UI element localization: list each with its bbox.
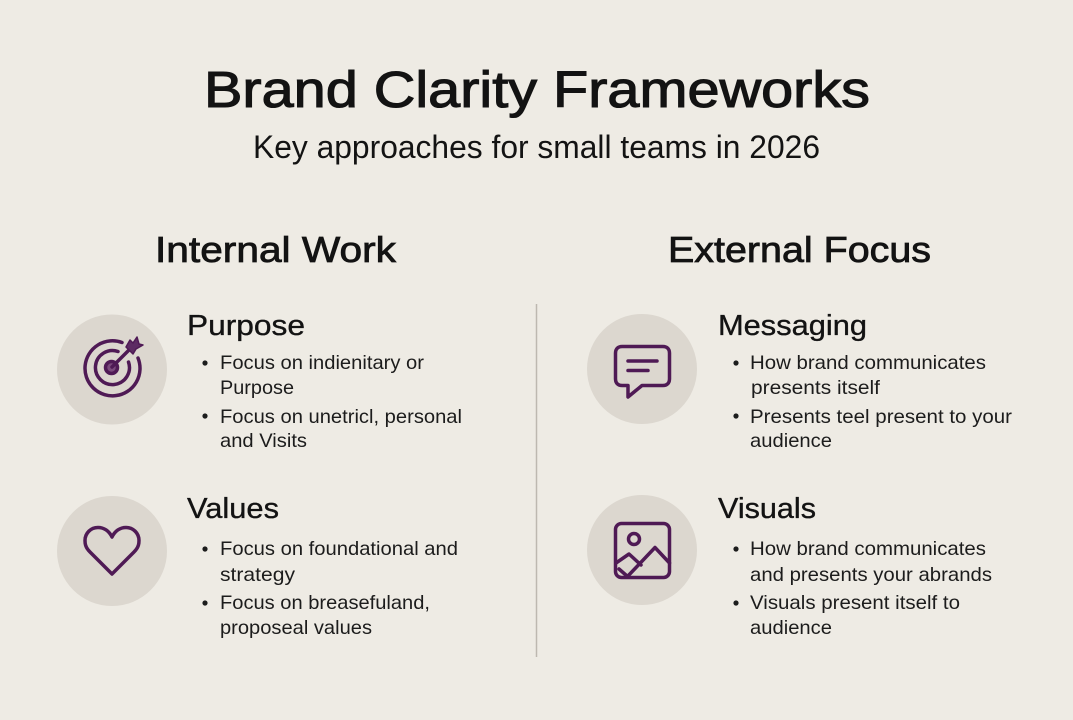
icon: image [587, 495, 697, 605]
item heading: Visuals [718, 493, 816, 525]
item heading: Values [187, 493, 279, 525]
bullet list: Focus on indienitary or [220, 352, 425, 374]
bullet list: How brand communicates [750, 538, 986, 560]
bullet list: Purpose [220, 377, 294, 399]
subtitle: Key approaches for small teams in 2026 [253, 129, 820, 165]
bullet list: Focus on unetricl, personal [220, 406, 462, 428]
panel: Purpose [57, 310, 462, 452]
bullet list: audience [750, 617, 832, 639]
icon: speech bubble [587, 314, 697, 424]
bullet list [733, 352, 1013, 452]
bullet list: Visuals present itself to [750, 592, 960, 614]
bullet list [202, 352, 462, 452]
bullet list: Focus on breasefuland, [220, 592, 430, 614]
heading: Internal Work: Internal Work [155, 229, 397, 270]
bullet list [202, 538, 458, 639]
title: Brand Clarity Frameworks [204, 61, 870, 118]
item heading: Messaging [718, 310, 867, 342]
bullet list: proposeal values [220, 617, 372, 639]
heading: External Focus: External Focus [668, 229, 931, 270]
bullet list: and Visits [220, 430, 307, 452]
panel: Messaging [587, 310, 1013, 452]
icon: heart [57, 496, 167, 606]
panel: Visuals [587, 493, 992, 639]
bullet list [733, 538, 992, 639]
bullet list: audience [750, 430, 832, 452]
bullet list: Presents teel present to your [750, 406, 1013, 428]
bullet list: and presents your abrands [750, 564, 992, 586]
bullet list: Focus on foundational and [220, 538, 458, 560]
icon: target with arrow [57, 314, 167, 424]
panel: Values [57, 493, 458, 639]
bullet list: strategy [220, 564, 295, 586]
bullet list: presents itself [751, 377, 881, 399]
item heading: Purpose [187, 310, 305, 342]
bullet list: How brand communicates [750, 352, 986, 374]
